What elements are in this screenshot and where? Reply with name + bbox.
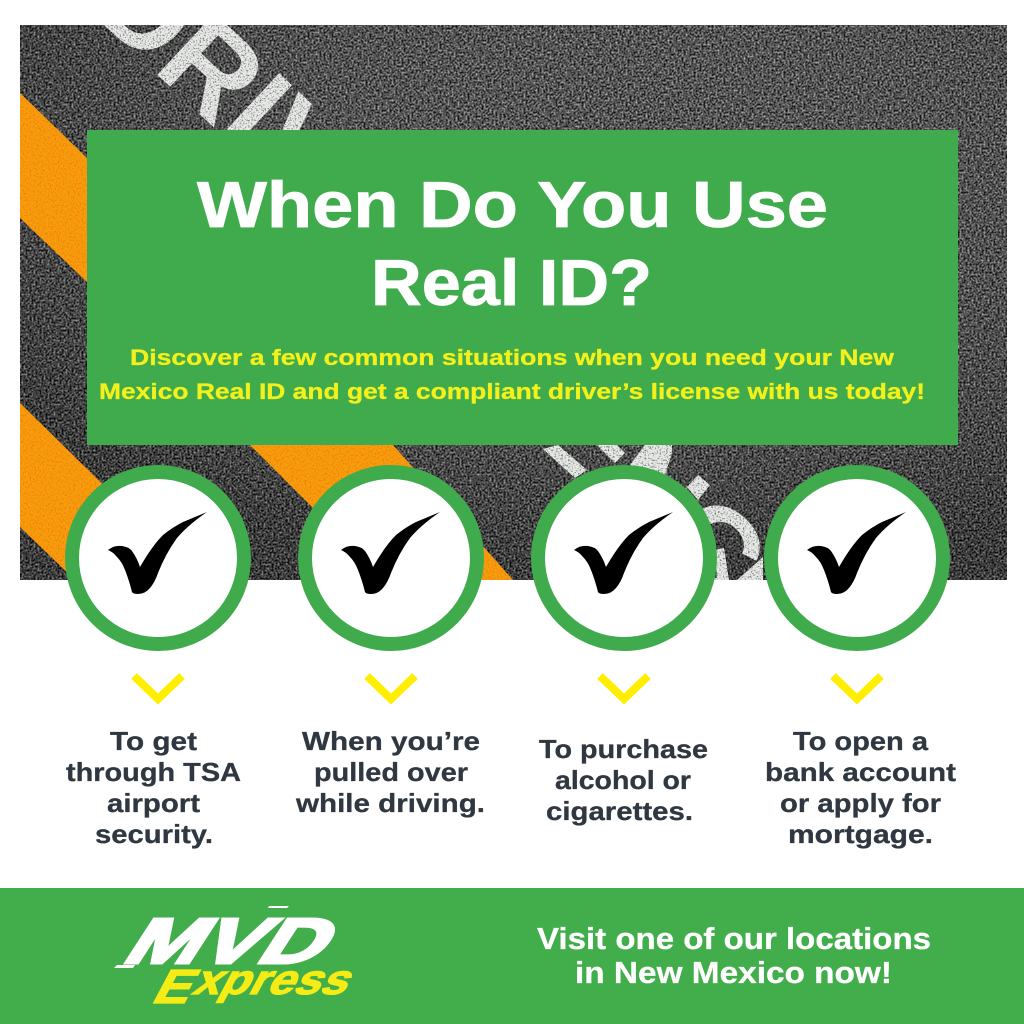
call to action: [537, 921, 931, 990]
icon: check circle 4: [771, 472, 943, 644]
text block: TSA: [66, 726, 241, 849]
title: [197, 168, 828, 319]
text block: TSA: To get: [110, 726, 197, 756]
panel: footer band: [0, 888, 1024, 1024]
arrow: chevron 1: [134, 676, 182, 699]
text block: alcohol or cigarettes: cigarettes.: [546, 796, 693, 826]
text block: pulled over: [295, 726, 485, 818]
painted road marks, lower word: [543, 445, 763, 580]
background photo: asphalt road with markings: [20, 25, 1007, 580]
logo: MVD Express: E: [145, 960, 209, 1013]
text block: bank account: or apply for: [780, 788, 941, 818]
call to action: in New Mexico now!: [575, 955, 892, 990]
arrow: chevron 4: [833, 676, 881, 699]
logo: MVD Express: xpress: [186, 956, 365, 1003]
text block: TSA: security.: [95, 819, 213, 849]
text block: alcohol or cigarettes: [539, 734, 708, 826]
text block: pulled over: while driving.: [295, 788, 485, 818]
text block: bank account: To open a: [793, 726, 929, 756]
title: Real ID?: [371, 246, 652, 319]
call to action: Visit one of our locations: [537, 921, 931, 956]
arrow: chevron 2: [367, 676, 415, 699]
icon: check circle 2: [305, 472, 477, 644]
arrow: chevron 3: [600, 676, 648, 699]
panel: title box: [87, 130, 958, 445]
subtitle: [99, 345, 925, 404]
painted road marks, lower word: C: [635, 469, 792, 628]
subtitle: Mexico Real ID and get a compliant driver’s license with us today!: [99, 379, 925, 404]
text block: TSA: through TSA: [66, 757, 241, 787]
text block: alcohol or cigarettes: To purchase: [539, 734, 708, 764]
logo: MVD Express: [111, 905, 365, 1013]
title: When Do You Use: [197, 168, 828, 241]
text block: bank account: [765, 726, 956, 849]
subtitle: Discover a few common situations when you need your New: [130, 345, 895, 370]
icon: check circle 3: [538, 472, 710, 644]
logo: MVD Express: MVD: [111, 905, 356, 977]
text block: pulled over: pulled over: [314, 757, 468, 787]
icon: check circle 1: [72, 472, 244, 644]
text block: pulled over: When you’re: [302, 726, 480, 756]
text block: alcohol or cigarettes: alcohol or: [555, 765, 691, 795]
text block: TSA: airport: [107, 788, 200, 818]
text block: bank account: bank account: [765, 757, 956, 787]
text block: bank account: mortgage.: [788, 819, 933, 849]
orange road stripes: [20, 93, 513, 580]
